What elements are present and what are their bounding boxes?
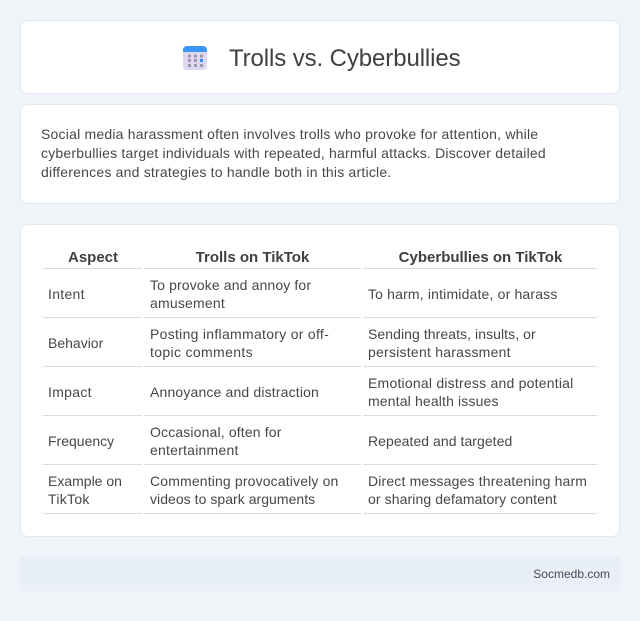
row: intent: amusement: [150, 295, 225, 311]
table header: Aspect: [68, 249, 118, 266]
row: impact: Emotional distress and potential: [368, 375, 574, 391]
row: example on TikTok: Example on: [48, 473, 122, 489]
row: frequency: [43, 415, 597, 458]
row: behavior: Posting inflammatory or off-: [150, 326, 329, 342]
table header: Trolls on TikTok: [196, 249, 309, 266]
row: impact: Annoyance and distraction: [150, 384, 319, 400]
footer bar: [20, 557, 620, 591]
row: example on TikTok: TikTok: [48, 491, 90, 507]
panel: comparison table: [20, 224, 620, 537]
row: behavior: Sending threats, insults, or: [368, 326, 536, 342]
row: intent: To harm, intimidate, or harass: [368, 286, 558, 302]
icon: calendar: [183, 46, 207, 70]
panel: intro text: [20, 104, 620, 204]
row: frequency: Repeated and targeted: [368, 433, 512, 449]
row: behavior: persistent harassment: [368, 344, 511, 360]
row: intent: [43, 268, 597, 311]
row: behavior: [43, 317, 597, 360]
row: impact: [43, 366, 597, 409]
row: behavior: topic comments: [150, 344, 253, 360]
row: behavior: Behavior: [48, 335, 103, 351]
title: Trolls vs. Cyberbullies: [229, 45, 461, 72]
table header: Cyberbullies on TikTok: [399, 249, 562, 266]
row: frequency: Frequency: [48, 433, 114, 449]
panel: intro text: cyberbullies target individuals with repeated, harmful attacks. Discover detailed: [41, 145, 546, 161]
panel: intro text: differences and strategies to handle both in this article.: [41, 164, 391, 180]
panel: intro text: Social media harassment often involves trolls who provoke for attention, while: [41, 126, 538, 142]
row: frequency: Occasional, often for: [150, 424, 282, 440]
row: impact: Impact: [48, 384, 92, 400]
table header: [68, 249, 562, 266]
row: example on TikTok: videos to spark arguments: [150, 491, 315, 507]
row: intent: To provoke and annoy for: [150, 277, 311, 293]
row: intent: Intent: [48, 286, 85, 302]
row: example on TikTok: Commenting provocatively on: [150, 473, 338, 489]
row: example on TikTok: [43, 464, 597, 514]
row: frequency: entertainment: [150, 442, 239, 458]
footer text: Socmedb.com: [533, 567, 610, 581]
row: example on TikTok: or sharing defamatory content: [368, 491, 557, 507]
panel: title card: [20, 20, 620, 94]
row: impact: mental health issues: [368, 393, 499, 409]
row: example on TikTok: Direct messages threatening harm: [368, 473, 587, 489]
